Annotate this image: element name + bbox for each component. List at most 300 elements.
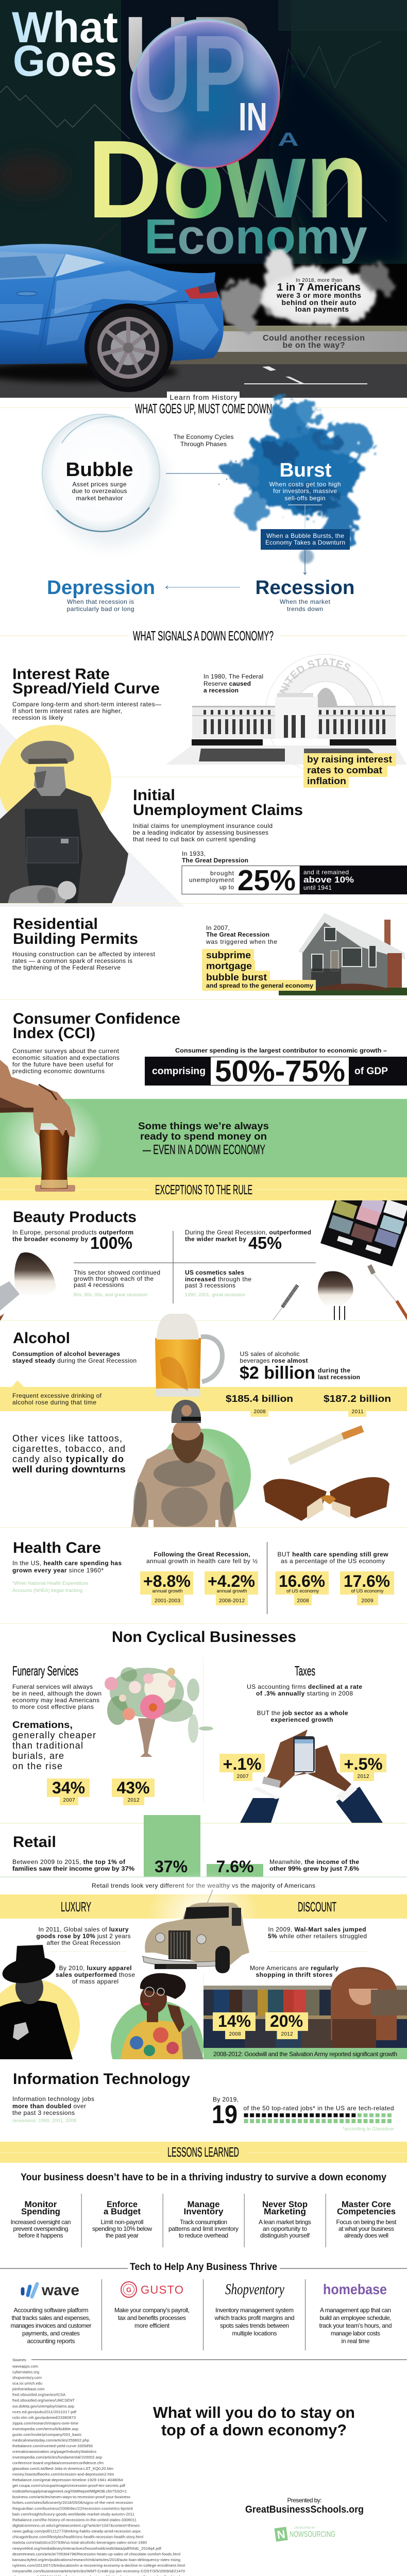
economy note: BUT health care spending still grew bbox=[277, 1551, 388, 1558]
heading bbox=[13, 1010, 180, 1042]
lesson: master core competencies: Master Core bbox=[342, 2199, 391, 2209]
smoke callout text: 1 in 7 Americans bbox=[277, 282, 361, 293]
sources list: minyanville.com/businessmarkets/articles/WMT-Credit-jcp-jwn-economy-COST/3/5/2009/id/21470 bbox=[12, 2569, 185, 2573]
stat caption: Consumer spending is the largest contributor to economic growth – bbox=[175, 1047, 387, 1054]
lesson: manage inventory: to reduce overhead bbox=[179, 2232, 228, 2239]
lesson: monitor spending bbox=[10, 2199, 71, 2239]
stat: 43%: 2012 bbox=[128, 1798, 140, 1803]
panel: luxury bbox=[0, 1927, 204, 2059]
cremations text: on the rise bbox=[12, 1761, 62, 1771]
body: BUT the job sector as a whole bbox=[257, 1709, 348, 1717]
arrow: bubble to burst bbox=[166, 471, 240, 476]
stat: 50-75% bbox=[145, 1055, 407, 1088]
lesson: enforce a budget: spending to 10% below bbox=[92, 2225, 152, 2232]
note: 3 recessions: 1990, 2001, great recession bbox=[185, 1292, 245, 1297]
divider bbox=[0, 1527, 407, 1528]
road markings bbox=[244, 366, 367, 384]
recession note bbox=[146, 1551, 258, 1565]
stat: 25%: and it remained bbox=[303, 869, 349, 876]
photo: hands with phone bbox=[240, 1730, 383, 1823]
title: Down: Down bbox=[88, 117, 368, 241]
vices text: cigarettes, tobacco, and bbox=[12, 1444, 125, 1454]
question text: Could another recession bbox=[263, 334, 365, 343]
discount note 2: shopping in thrift stores bbox=[256, 1971, 333, 1978]
car bbox=[0, 224, 224, 392]
photo: flowers bbox=[105, 1667, 213, 1757]
body: of .3% annually starting in 2008 bbox=[256, 1690, 353, 1697]
title: A: A bbox=[278, 129, 299, 150]
lesson: never stop marketing: A lean market brings bbox=[259, 2218, 311, 2226]
lesson: master core competencies: Competencies bbox=[337, 2207, 396, 2216]
heading: Building Permits bbox=[13, 930, 138, 947]
tool: gusto: more efficient bbox=[134, 2322, 170, 2329]
body bbox=[247, 1683, 362, 1723]
cremations text: Cremations, bbox=[12, 1720, 73, 1730]
luxury note 2: By 2010, luxury apparel bbox=[59, 1964, 132, 1972]
lesson: master core competencies: Focus on being the best bbox=[336, 2218, 397, 2226]
stat: 100%: 100% bbox=[90, 1233, 132, 1252]
fed caption: Reserve caused bbox=[204, 680, 251, 687]
sources list: cremationassociation.org/page/IndustryStatistics bbox=[12, 2449, 96, 2454]
sources list: kansascityfed.org/en/publications/research/mb/articles/2018/auto-loan-delinquency-rates-rising bbox=[12, 2557, 180, 2562]
lesson: manage inventory: Manage bbox=[188, 2199, 219, 2209]
body: stayed steady during the Great Recession bbox=[12, 1357, 137, 1364]
yellow circle bbox=[0, 725, 111, 838]
cycles caption: Through Phases bbox=[180, 440, 227, 448]
panel: information technology bbox=[12, 2071, 394, 2131]
body: Funeral services will always bbox=[12, 1683, 93, 1690]
body: predicting economic downturns bbox=[12, 1067, 105, 1075]
body: recession is likely bbox=[12, 714, 63, 721]
body: Housing construction can be affected by interest bbox=[12, 951, 156, 958]
icon: thin brush bbox=[369, 1265, 407, 1321]
cremations text: burials, are bbox=[12, 1751, 64, 1761]
tool: homebase: build an employee schedule, bbox=[319, 2314, 392, 2321]
luxury note 2: of mass apparel bbox=[72, 1978, 118, 1985]
stat: 17.6%: of US economy bbox=[351, 1588, 384, 1594]
heading: Consumer Confidence bbox=[13, 1010, 180, 1027]
tool: wave bbox=[10, 2282, 92, 2345]
lesson: enforce a budget: a Budget bbox=[104, 2207, 141, 2216]
tool: wave: payments, and creates bbox=[22, 2330, 80, 2337]
sources list: theguardian.com/business/2008/dec/22/recession-cosmetics-lipstick bbox=[12, 2506, 133, 2511]
title: UP: UP bbox=[123, 0, 252, 101]
body right bbox=[269, 1858, 359, 1872]
heading bbox=[133, 787, 303, 819]
lessons band bbox=[0, 2142, 407, 2163]
tool: shopventory: multiple locations bbox=[232, 2330, 277, 2337]
body: Consumer surveys about the current bbox=[12, 1047, 120, 1055]
lesson: manage inventory bbox=[168, 2199, 239, 2239]
fed caption: a recession bbox=[204, 687, 239, 694]
body: economy may lead Americans bbox=[12, 1697, 99, 1704]
federal seal: UNITED STATES bbox=[279, 658, 350, 693]
vices text: well during downturns bbox=[12, 1464, 126, 1475]
lesson: never stop marketing: Marketing bbox=[264, 2207, 306, 2216]
cremations text bbox=[12, 1720, 96, 1771]
stat: 19 of 50: *according to Glassdoor bbox=[343, 2126, 394, 2131]
luxury note 2 bbox=[56, 1964, 135, 1985]
economy note bbox=[277, 1551, 388, 1565]
heading: Alcohol bbox=[13, 1330, 70, 1347]
stat: 20%: 2012 bbox=[281, 2031, 293, 2037]
bar chart: 37% bbox=[155, 1857, 188, 1876]
heading: Health Care bbox=[13, 1539, 101, 1556]
lesson: monitor spending: before it happens bbox=[19, 2232, 63, 2239]
sources list: newyorkfed.org/medialibrary/interactives/householdcredit/data/pdf/hhdc_2018q4.pdf bbox=[12, 2546, 162, 2551]
retail caption: Retail trends look very different for the wealthy vs the majority of Americans bbox=[92, 1882, 315, 1889]
body left: Between 2009 to 2015, the top 1% of bbox=[12, 1858, 126, 1866]
tool: gusto bbox=[114, 2282, 190, 2329]
body: experienced growth bbox=[271, 1716, 333, 1723]
housing highlight: subprime bbox=[206, 950, 251, 960]
stat: +8.8%: +8.8% bbox=[143, 1572, 191, 1590]
stat: $2 billion: US sales of alcoholic bbox=[240, 1350, 300, 1358]
sources list: thebalance.com/inverted-yield-curve-3305856 bbox=[12, 2444, 93, 2448]
green band text: Some things we’re always bbox=[138, 1121, 269, 1132]
depression caption: In 1933, bbox=[182, 850, 206, 857]
bubble text bbox=[66, 459, 133, 502]
yellow band bbox=[0, 1380, 407, 1411]
tool: shopventory: Inventory management system bbox=[215, 2307, 294, 2314]
drinking note: alcohol rose during that time bbox=[12, 1399, 96, 1406]
lesson: monitor spending: Monitor bbox=[25, 2199, 57, 2209]
bubble text: market behavior bbox=[76, 495, 123, 502]
panel: interest rate bbox=[12, 654, 407, 788]
title: What Goes: What bbox=[12, 3, 118, 52]
sources list: nces.ed.gov/pubs2011/2011017.pdf bbox=[12, 2410, 77, 2414]
stat: +4.2%: annual growth bbox=[216, 1588, 247, 1594]
burst text: Burst bbox=[279, 460, 332, 481]
tool: wave: accounting reports bbox=[27, 2337, 75, 2345]
stat: +.1%: +.1% bbox=[223, 1755, 262, 1773]
stat: 14%: 14% bbox=[218, 2012, 251, 2030]
heading: Initial bbox=[133, 787, 175, 804]
sources list: shopventory.com bbox=[12, 2376, 42, 2380]
sources list: waveapps.com bbox=[12, 2364, 38, 2369]
heading: What goes up: WHAT GOES UP, MUST COME DOWN bbox=[135, 401, 272, 416]
body right: other 99% grew by just 7.6% bbox=[269, 1865, 359, 1872]
stat: 25%: 25% bbox=[238, 864, 296, 897]
stat: 17.6%: 2009 bbox=[362, 1598, 374, 1604]
stat: 14%: 2008 bbox=[229, 2031, 241, 2037]
green band text bbox=[138, 1121, 269, 1157]
icon: bubble bbox=[42, 414, 170, 546]
lesson: manage inventory: patterns and limit inventory bbox=[168, 2225, 239, 2232]
body bbox=[12, 1047, 120, 1075]
stat: 16.6%: 16.6% bbox=[279, 1572, 325, 1590]
body bbox=[133, 822, 273, 843]
panel: residential bbox=[12, 913, 407, 995]
stat: 45%: the wider market by bbox=[185, 1235, 246, 1243]
title: IN: IN bbox=[239, 95, 267, 139]
green band text: — EVEN IN A DOWN ECONOMY bbox=[143, 1142, 265, 1157]
divider bbox=[0, 903, 407, 904]
lesson: enforce a budget bbox=[92, 2199, 152, 2239]
stat: 2008 sales bbox=[226, 1394, 293, 1417]
panel: tech tools bbox=[10, 2279, 392, 2350]
tool: shopventory: which tracks profit margins and bbox=[214, 2314, 295, 2321]
cycles caption: The Economy Cycles bbox=[173, 433, 234, 440]
note: 4 recessions bbox=[74, 1269, 160, 1297]
stat: 25%: up to bbox=[219, 884, 234, 891]
depression text: Depression bbox=[47, 577, 155, 599]
lesson: enforce a budget: the past year bbox=[106, 2232, 139, 2239]
body: grown every year since 1960* bbox=[12, 1567, 104, 1574]
bar chart bbox=[0, 1815, 407, 1877]
body: be a leading indicator by assessing businesses bbox=[133, 829, 268, 836]
sources list: fred.stlouisfed.org/series/UMCSENT bbox=[12, 2398, 75, 2403]
2007 caption: In 2007, bbox=[206, 924, 230, 931]
heading: Spread/Yield Curve bbox=[12, 680, 160, 697]
sources list: thebalance.com/the-history-of-recessions-in-the-united-states-3306011 bbox=[12, 2517, 137, 2522]
logo: nowsourcing bbox=[274, 2527, 335, 2541]
body: more than doubled over bbox=[12, 2103, 86, 2110]
body left: families saw their income grow by 37% bbox=[12, 1865, 134, 1872]
stat: +4.2% bbox=[205, 1571, 258, 1605]
luxury discount band: DISCOUNT bbox=[298, 1899, 336, 1914]
stat: 20% bbox=[265, 2012, 308, 2039]
fed highlight bbox=[303, 753, 396, 788]
heading: Beauty Products bbox=[13, 1209, 137, 1226]
icon: eyeshadow palette bbox=[320, 1200, 407, 1266]
body bbox=[12, 1350, 137, 1364]
stat: $2 billion: $2 billion bbox=[240, 1363, 315, 1383]
green circle bbox=[158, 1429, 251, 1521]
stat: 50-75%: 50%-75% bbox=[215, 1055, 345, 1088]
lesson: enforce a budget: Enforce bbox=[107, 2199, 138, 2209]
stat: +4.2%: +4.2% bbox=[208, 1572, 255, 1590]
green band text: ready to spend money on bbox=[140, 1131, 267, 1142]
recession text bbox=[256, 577, 354, 613]
callout: downturn: When a Bubble Bursts, the bbox=[266, 532, 344, 539]
recession note: annual growth in health care fell by ½ bbox=[146, 1557, 258, 1565]
chart: 50 squares bbox=[244, 2113, 392, 2123]
presenter bbox=[245, 2497, 364, 2515]
divider bbox=[0, 1823, 407, 1824]
discount note 1: 5% while other retailers struggled bbox=[268, 1933, 367, 1940]
sources list: business.com/articles/seven-ways-to-recession-proof-your-business bbox=[12, 2495, 130, 2499]
stat: 100%: the broader economy by bbox=[12, 1235, 88, 1243]
lesson: monitor spending: prevent overspending bbox=[13, 2225, 68, 2232]
lesson: never stop marketing: Never Stop bbox=[262, 2199, 308, 2209]
body: be in need, although the down bbox=[12, 1690, 101, 1697]
note: 4 recessions: past 4 recessions bbox=[74, 1281, 124, 1289]
housing highlight: and spread to the general economy bbox=[206, 982, 313, 989]
note: 4 recessions: growth through each of the bbox=[74, 1275, 154, 1282]
stat: 16.6% bbox=[275, 1571, 329, 1605]
heading: Information Technology bbox=[13, 2071, 190, 2088]
divider bbox=[0, 1623, 407, 1624]
stat: $2 billion: beverages rose almost bbox=[240, 1357, 308, 1364]
drinking note bbox=[12, 1392, 102, 1406]
body: Initial claims for unemployment insurance could bbox=[133, 822, 273, 829]
body bbox=[12, 1683, 101, 1710]
lesson: never stop marketing: an opportunity to bbox=[263, 2225, 307, 2232]
depression text bbox=[47, 577, 155, 613]
burst text: When costs get too high bbox=[269, 481, 341, 488]
panel: health care bbox=[12, 1539, 394, 1614]
body bbox=[12, 2095, 94, 2123]
body bbox=[12, 701, 161, 721]
body: that need to cut back on current spending bbox=[133, 836, 256, 843]
body bbox=[12, 1560, 122, 1593]
note: 4 recessions: This sector showed continued bbox=[74, 1269, 160, 1276]
stat: 25%: unemployment bbox=[189, 876, 234, 884]
stat: $2 billion: last recession bbox=[318, 1374, 360, 1381]
burst text: for investors, massive bbox=[273, 487, 337, 495]
housing highlight: mortgage bbox=[206, 961, 252, 971]
logo: nowsourcing: NOWSOURCING bbox=[290, 2530, 335, 2539]
body: Information technology jobs bbox=[12, 2095, 94, 2103]
stat: 34%: 34% bbox=[52, 1778, 85, 1797]
icon: N mark: N bbox=[276, 2528, 286, 2541]
smoke bbox=[219, 248, 391, 329]
stat: 2011 sales bbox=[324, 1394, 391, 1417]
panel: lessons bbox=[10, 2194, 397, 2247]
panel: unemployment bbox=[133, 787, 407, 897]
photo: house bbox=[279, 913, 407, 995]
stat: 2011 sales: $187.2 billion bbox=[324, 1394, 391, 1404]
photo: hand and beer bbox=[0, 1060, 75, 1192]
fed caption bbox=[204, 673, 263, 694]
callout: downturn: Economy Takes a Downturn bbox=[265, 539, 345, 546]
luxury note 1 bbox=[36, 1926, 131, 1952]
body: to more cost effective plans bbox=[12, 1703, 94, 1710]
body: If short term interest rates are higher, bbox=[12, 707, 122, 715]
lessons band: LESSONS LEARNED bbox=[167, 2144, 239, 2160]
tool: shopventory bbox=[214, 2281, 295, 2337]
economy note: as a percentage of the US economy bbox=[281, 1557, 385, 1565]
heading: Funerary Services bbox=[12, 1663, 78, 1679]
lesson: never stop marketing: distinguish yourself bbox=[260, 2232, 310, 2239]
photo: worker bbox=[0, 741, 128, 906]
sources list: money.howstuffworks.com/recession-and-depression2.htm bbox=[12, 2472, 114, 2477]
housing highlight: bubble burst bbox=[206, 972, 267, 982]
sources list: nytimes.com/2013/07/26/education/in-a-recovering-economy-a-decline-in-college-enrollment.html bbox=[12, 2563, 185, 2568]
stat: +8.8% bbox=[140, 1571, 193, 1605]
body left bbox=[12, 1858, 134, 1872]
tool: homebase: manage labor costs bbox=[331, 2330, 380, 2337]
tool: shopventory: spots sales trends between bbox=[220, 2322, 289, 2329]
lesson: monitor spending: Increased oversight can bbox=[10, 2218, 71, 2226]
discount note 1: In 2009, Wal-Mart sales jumped bbox=[268, 1926, 366, 1933]
bar chart: 7.6% bbox=[216, 1857, 253, 1876]
tool: wave: Accounting software platform bbox=[13, 2307, 89, 2314]
logo: nowsourcing: DEVELOPED BY bbox=[295, 2527, 315, 2530]
title: What Goes: Goes bbox=[13, 37, 117, 85]
panel: consumer confidence bbox=[12, 1010, 407, 1088]
divider bbox=[0, 1320, 407, 1321]
federal seal bbox=[266, 654, 383, 769]
body: *When National Health Expenditure bbox=[12, 1581, 88, 1586]
sources list: conference-board.org/data/consumerconfidence.cfm bbox=[12, 2461, 104, 2465]
goodwill caption: 2008-2012: Goodwill and the Salvation Army reported significant growth bbox=[213, 2050, 397, 2058]
body: the tightening of the Federal Reserve bbox=[12, 964, 121, 971]
beer glow bbox=[0, 1095, 103, 1188]
closing question: top of a down economy? bbox=[161, 2421, 347, 2439]
housing highlight bbox=[202, 949, 316, 991]
fed caption: In 1980, The Federal bbox=[204, 673, 263, 680]
sources list: bain.com/insights/luxury-goods-worldwide-market-study-autumn-2011 bbox=[12, 2512, 134, 2516]
note: 3 recessions bbox=[185, 1269, 251, 1297]
sources list: zippia.com/research/majors-over-time bbox=[12, 2421, 78, 2426]
sources list: oui.doleta.gov/unemploy/claims.asp bbox=[12, 2404, 74, 2409]
stat: 45% bbox=[185, 1229, 311, 1252]
heading: Retail bbox=[13, 1834, 56, 1851]
stat: 25%: above 10% bbox=[303, 875, 354, 885]
sources list: ncbi.nlm.nih.gov/pubmed/23360873 bbox=[12, 2415, 76, 2420]
sources list: cyberstates.org bbox=[12, 2370, 39, 2374]
yellow circle bbox=[0, 1980, 80, 2054]
heading: tech: Tech to Help Any Business Thrive bbox=[130, 2262, 277, 2273]
lesson: enforce a budget: Limit non-payroll bbox=[101, 2218, 143, 2226]
body: for the future have been useful for bbox=[12, 1061, 113, 1068]
stat: 2008 sales: 2008 bbox=[253, 1409, 266, 1415]
photo: vintage car bbox=[143, 1890, 249, 1973]
recession text: Recession bbox=[256, 577, 354, 599]
smoke callout text bbox=[276, 278, 361, 313]
stat: 34%: 2007 bbox=[63, 1798, 75, 1803]
stat: $2 billion bbox=[240, 1350, 360, 1383]
stat: 25%: until 1941 bbox=[303, 884, 332, 891]
body: the past 3 recessions bbox=[12, 2109, 75, 2116]
lesson: manage inventory: Inventory bbox=[183, 2207, 224, 2216]
panel: hero bbox=[0, 0, 407, 398]
icon: cigarette bbox=[289, 1429, 363, 1462]
presenter: GreatBusinessSchools.org bbox=[245, 2504, 364, 2515]
stat: +.5%: 2012 bbox=[358, 1774, 369, 1780]
tool: homebase bbox=[319, 2281, 392, 2345]
section label: Learn from History: Learn from History bbox=[170, 393, 237, 401]
depression text: When that recession is bbox=[67, 598, 134, 605]
stat: 14% bbox=[213, 2012, 256, 2039]
body: Accounts (NHEA) began tracking bbox=[12, 1588, 82, 1593]
fed highlight: by raising interest bbox=[307, 754, 392, 765]
stat: 43%: 43% bbox=[116, 1778, 149, 1797]
sources list bbox=[12, 2358, 407, 2576]
stat: 100%: In Europe, personal products outperform bbox=[12, 1229, 133, 1236]
sources list: thebalance.com/great-depression-timeline-1929-1941-4048064 bbox=[12, 2478, 123, 2482]
body: Consumption of alcohol beverages bbox=[12, 1350, 120, 1358]
discount note 2: More Americans are regularly bbox=[250, 1964, 338, 1972]
heading: Interest Rate bbox=[12, 666, 110, 683]
burst text bbox=[269, 460, 341, 502]
sources list: investopedia.com/terms/b/bubble.asp bbox=[12, 2427, 78, 2431]
photo: tattooed man bbox=[131, 1400, 236, 1527]
stat: 16.6%: 2008 bbox=[297, 1598, 309, 1604]
panel: funerary bbox=[12, 1657, 213, 1805]
bubble: UP bbox=[132, 12, 246, 134]
stat: 50-75%: comprising bbox=[152, 1066, 206, 1077]
icon: mascara bbox=[273, 1285, 298, 1320]
heading: Index (CCI) bbox=[13, 1025, 95, 1042]
sources list: investopedia.com/articles/fundamental/103002.asp bbox=[12, 2455, 102, 2460]
sources list: forbes.com/sites/billconerly/2018/05/06/signs-of-the-next-recession bbox=[12, 2500, 133, 2505]
stat: +.1% bbox=[219, 1754, 265, 1781]
tool: shopventory: Shopventory bbox=[225, 2281, 285, 2298]
exceptions band: EXCEPTIONS TO THE RULE bbox=[155, 1182, 252, 1197]
heading: Taxes bbox=[295, 1663, 315, 1679]
body: Compare long-term and short-term interest rates— bbox=[12, 701, 161, 708]
panel: cycle phases bbox=[42, 400, 372, 613]
body: US accounting firms declined at a rate bbox=[247, 1683, 362, 1690]
icon: round brush bbox=[318, 1271, 353, 1320]
stat: 2008 sales: $185.4 billion bbox=[226, 1394, 293, 1404]
recession note: Following the Great Recession, bbox=[154, 1551, 250, 1558]
sources list: news.gallup.com/poll/121277/drinking-habits-steady-amid-recession.aspx bbox=[12, 2529, 141, 2534]
depression text: particularly bad or long bbox=[67, 605, 134, 613]
